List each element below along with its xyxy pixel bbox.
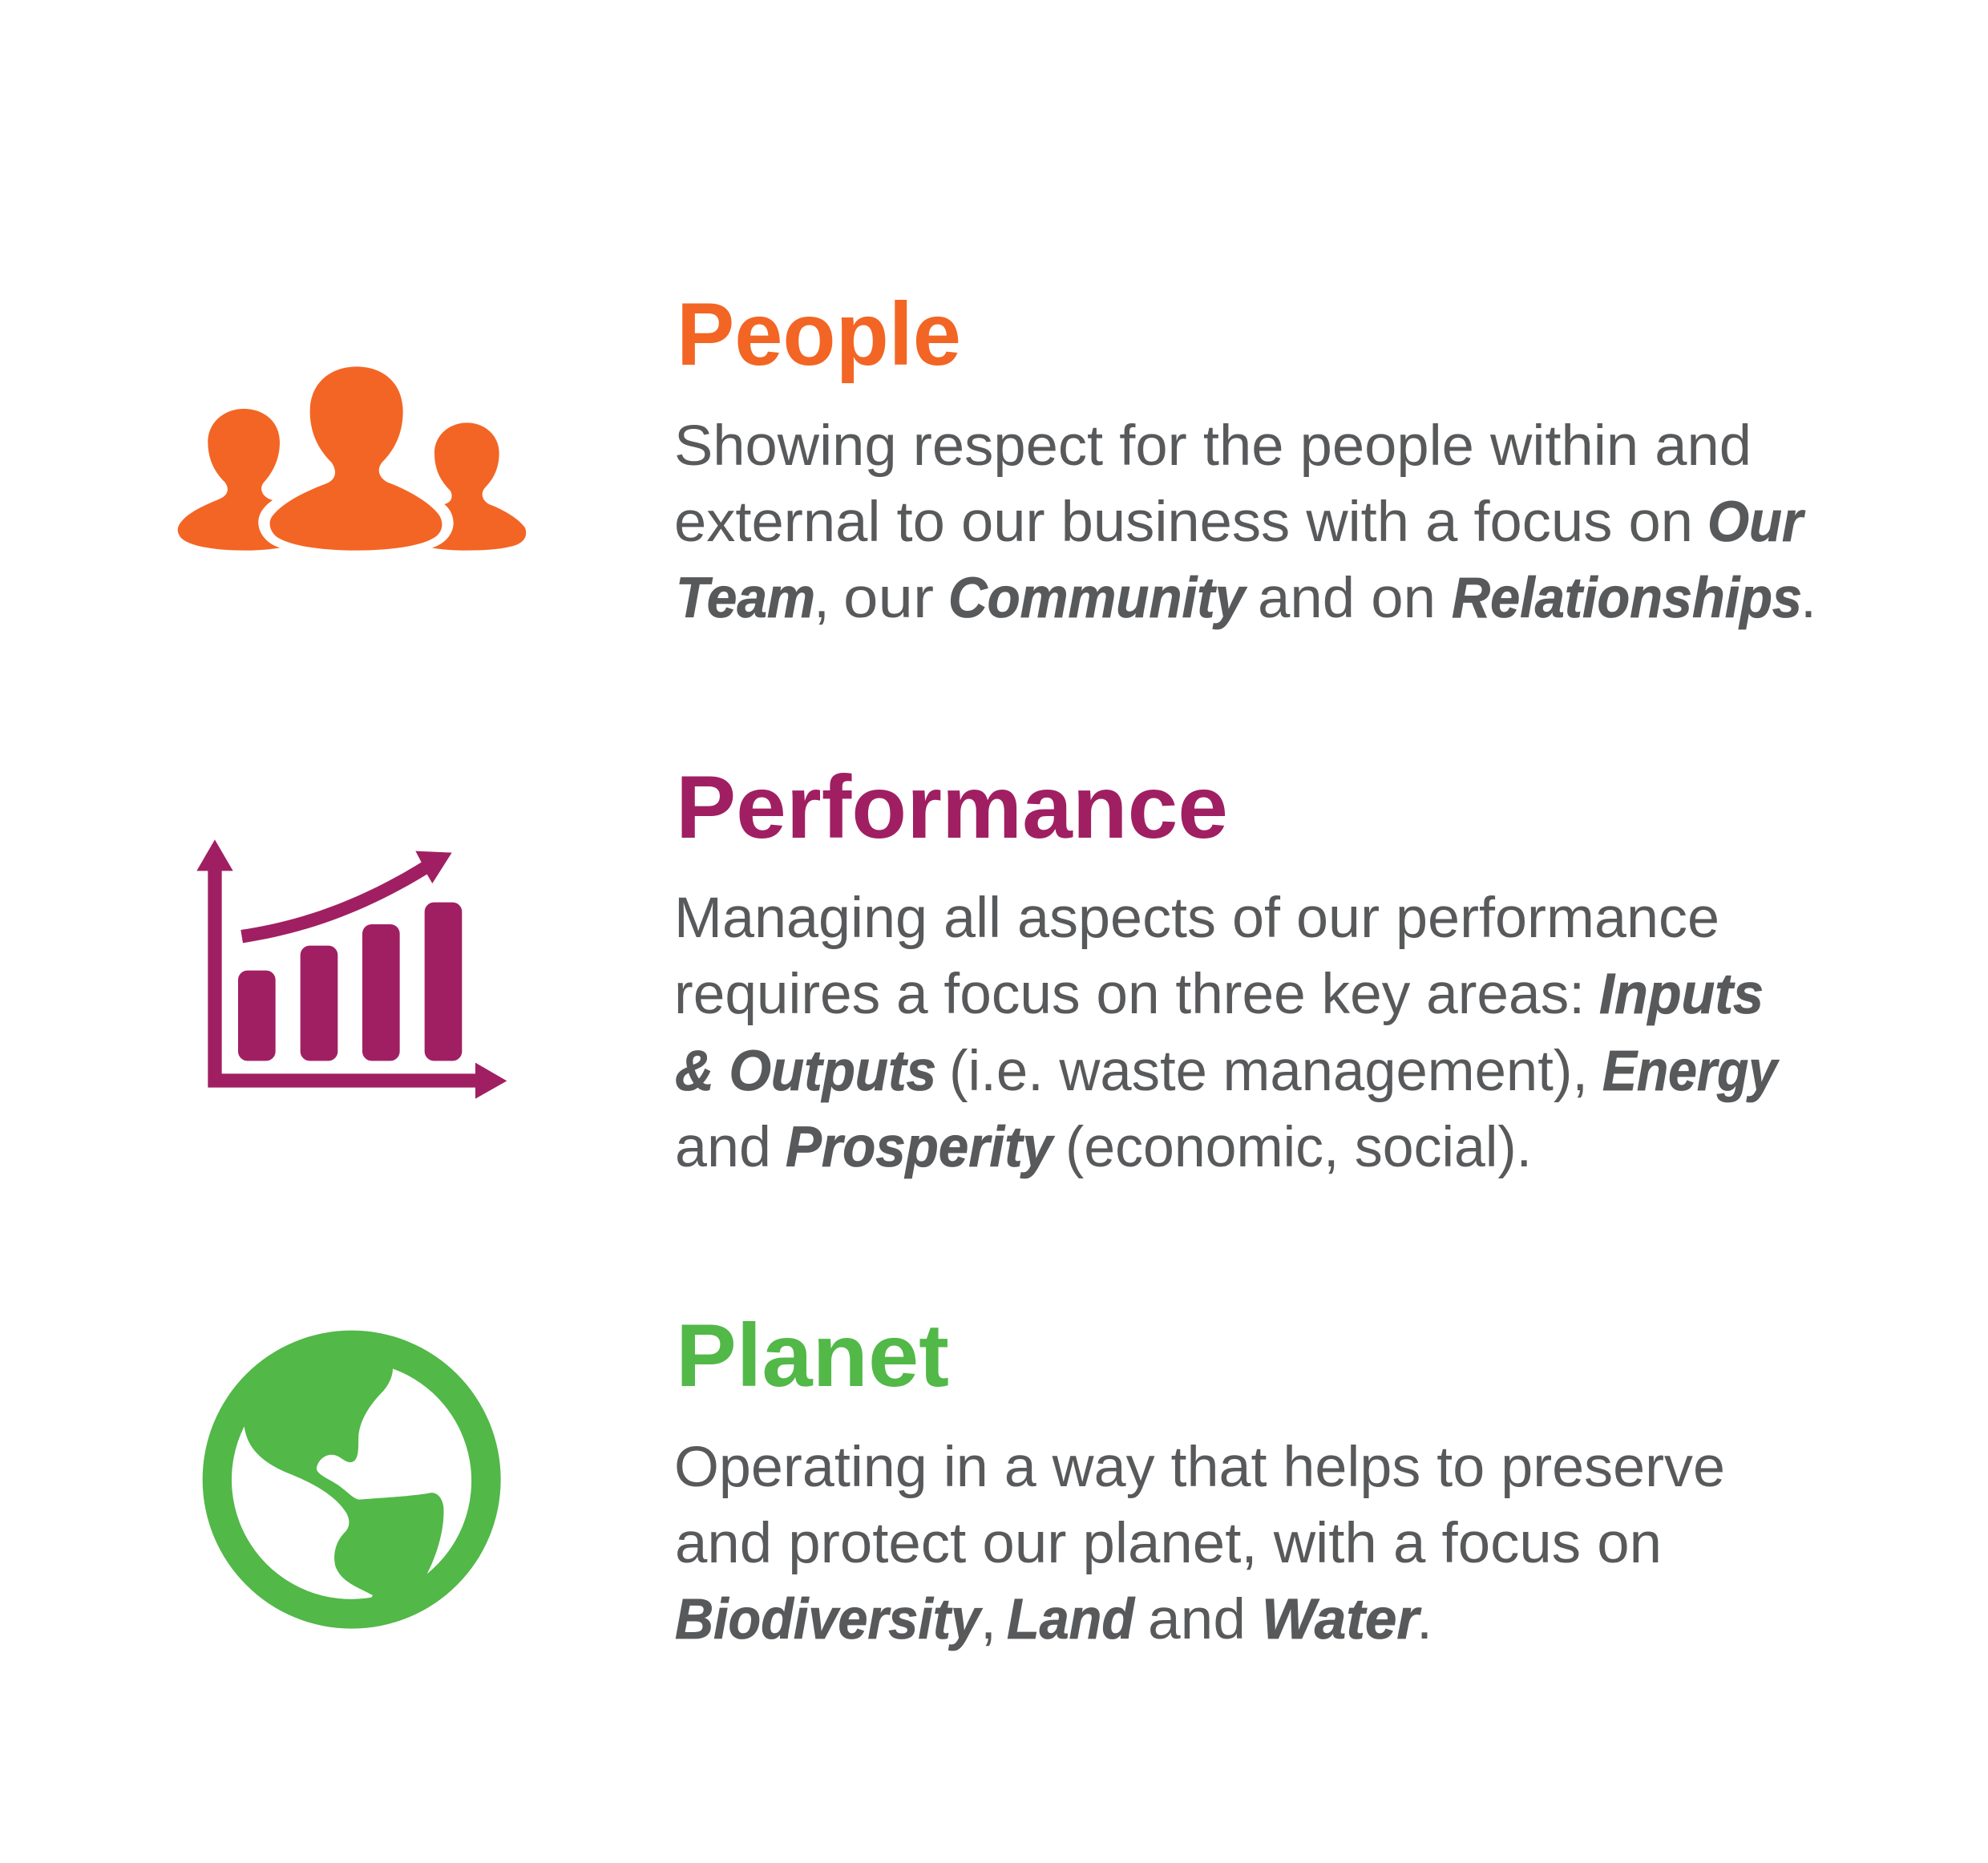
- text block: Planet description: Operating in a way that helps to preserve: [674, 1436, 1725, 1499]
- text block: Planet description: and protect our planet, with a focus on: [675, 1512, 1662, 1575]
- text block: People description: ,: [814, 567, 830, 630]
- text block: People description: .: [1800, 567, 1816, 630]
- text block: Performance description: [674, 887, 1780, 1179]
- text block: People description: external to our business with a focus on: [674, 491, 1693, 554]
- text block: Performance description: & Outputs: [675, 1040, 936, 1103]
- text block: Planet description: Biodiversity: [675, 1588, 983, 1651]
- text block: Planet description: Water: [1262, 1588, 1421, 1651]
- text block: People description: and on: [1258, 567, 1436, 630]
- text block: Planet description: .: [1416, 1588, 1432, 1651]
- text block: People description: Showing respect for the people within and: [674, 414, 1752, 478]
- icon: globe: [203, 1331, 501, 1629]
- text block: People description: Relationships: [1452, 567, 1802, 630]
- text block: Planet description: ,: [980, 1588, 996, 1651]
- text block: People description: Our: [1707, 491, 1805, 554]
- text block: People description: Team: [676, 567, 815, 630]
- heading: Planet: Planet: [676, 1306, 949, 1405]
- text block: Performance description: (economic, social).: [1065, 1116, 1532, 1179]
- text block: Performance description: requires a focus on three key areas:: [674, 963, 1585, 1026]
- icon: rising bar chart: [196, 839, 507, 1099]
- text block: Performance description: Managing all aspects of our performance: [674, 887, 1719, 950]
- text block: Performance description: and: [675, 1116, 771, 1179]
- text block: Planet description: [674, 1436, 1725, 1651]
- text block: People description: [674, 414, 1816, 630]
- text block: Performance description: (i.e. waste management),: [949, 1040, 1588, 1103]
- heading: Performance: Performance: [676, 758, 1228, 857]
- text block: Planet description: Land: [1007, 1588, 1136, 1651]
- text block: People description: Community: [948, 567, 1247, 630]
- text block: Planet description: and: [1148, 1588, 1246, 1651]
- heading: People: People: [677, 285, 961, 384]
- text block: Performance description: Energy: [1602, 1040, 1780, 1103]
- icon: people group: [178, 366, 526, 551]
- text block: People description: our: [843, 567, 934, 630]
- text block: Performance description: Inputs: [1599, 963, 1764, 1026]
- text block: Performance description: Prosperity: [786, 1116, 1055, 1179]
